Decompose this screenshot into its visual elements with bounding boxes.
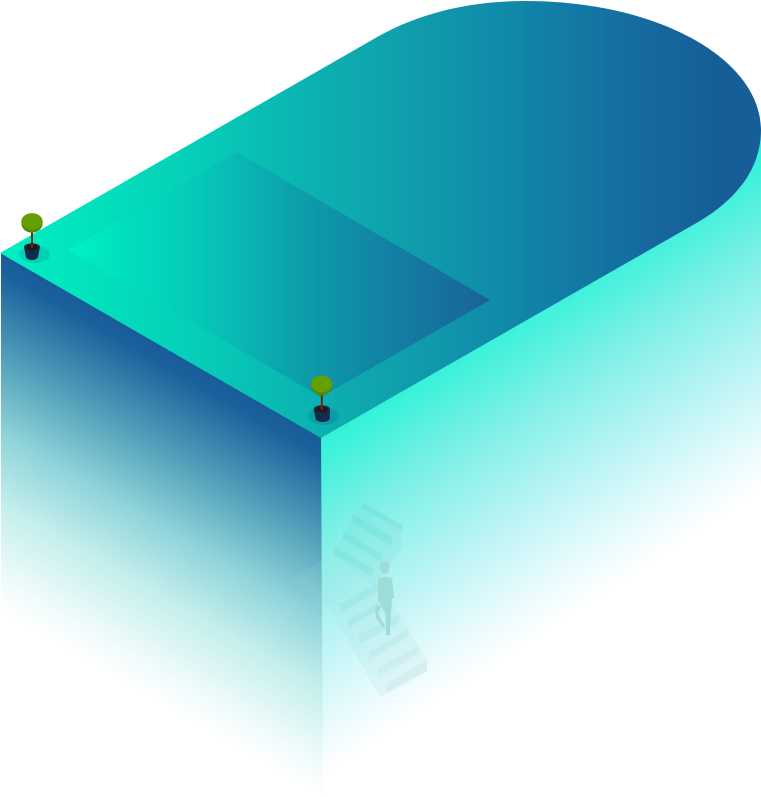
panel: right face [321, 130, 761, 797]
icon: person walking [375, 562, 394, 635]
panel: top face [0, 1, 761, 438]
illustration: staircase [293, 502, 427, 697]
landing [293, 554, 377, 608]
panel: inner recessed area [68, 152, 490, 397]
lower flight [322, 583, 427, 697]
panel: left face [1, 253, 323, 797]
upper flight [333, 502, 402, 585]
icon: plant left [19, 213, 50, 263]
icon: plant right [308, 376, 339, 425]
